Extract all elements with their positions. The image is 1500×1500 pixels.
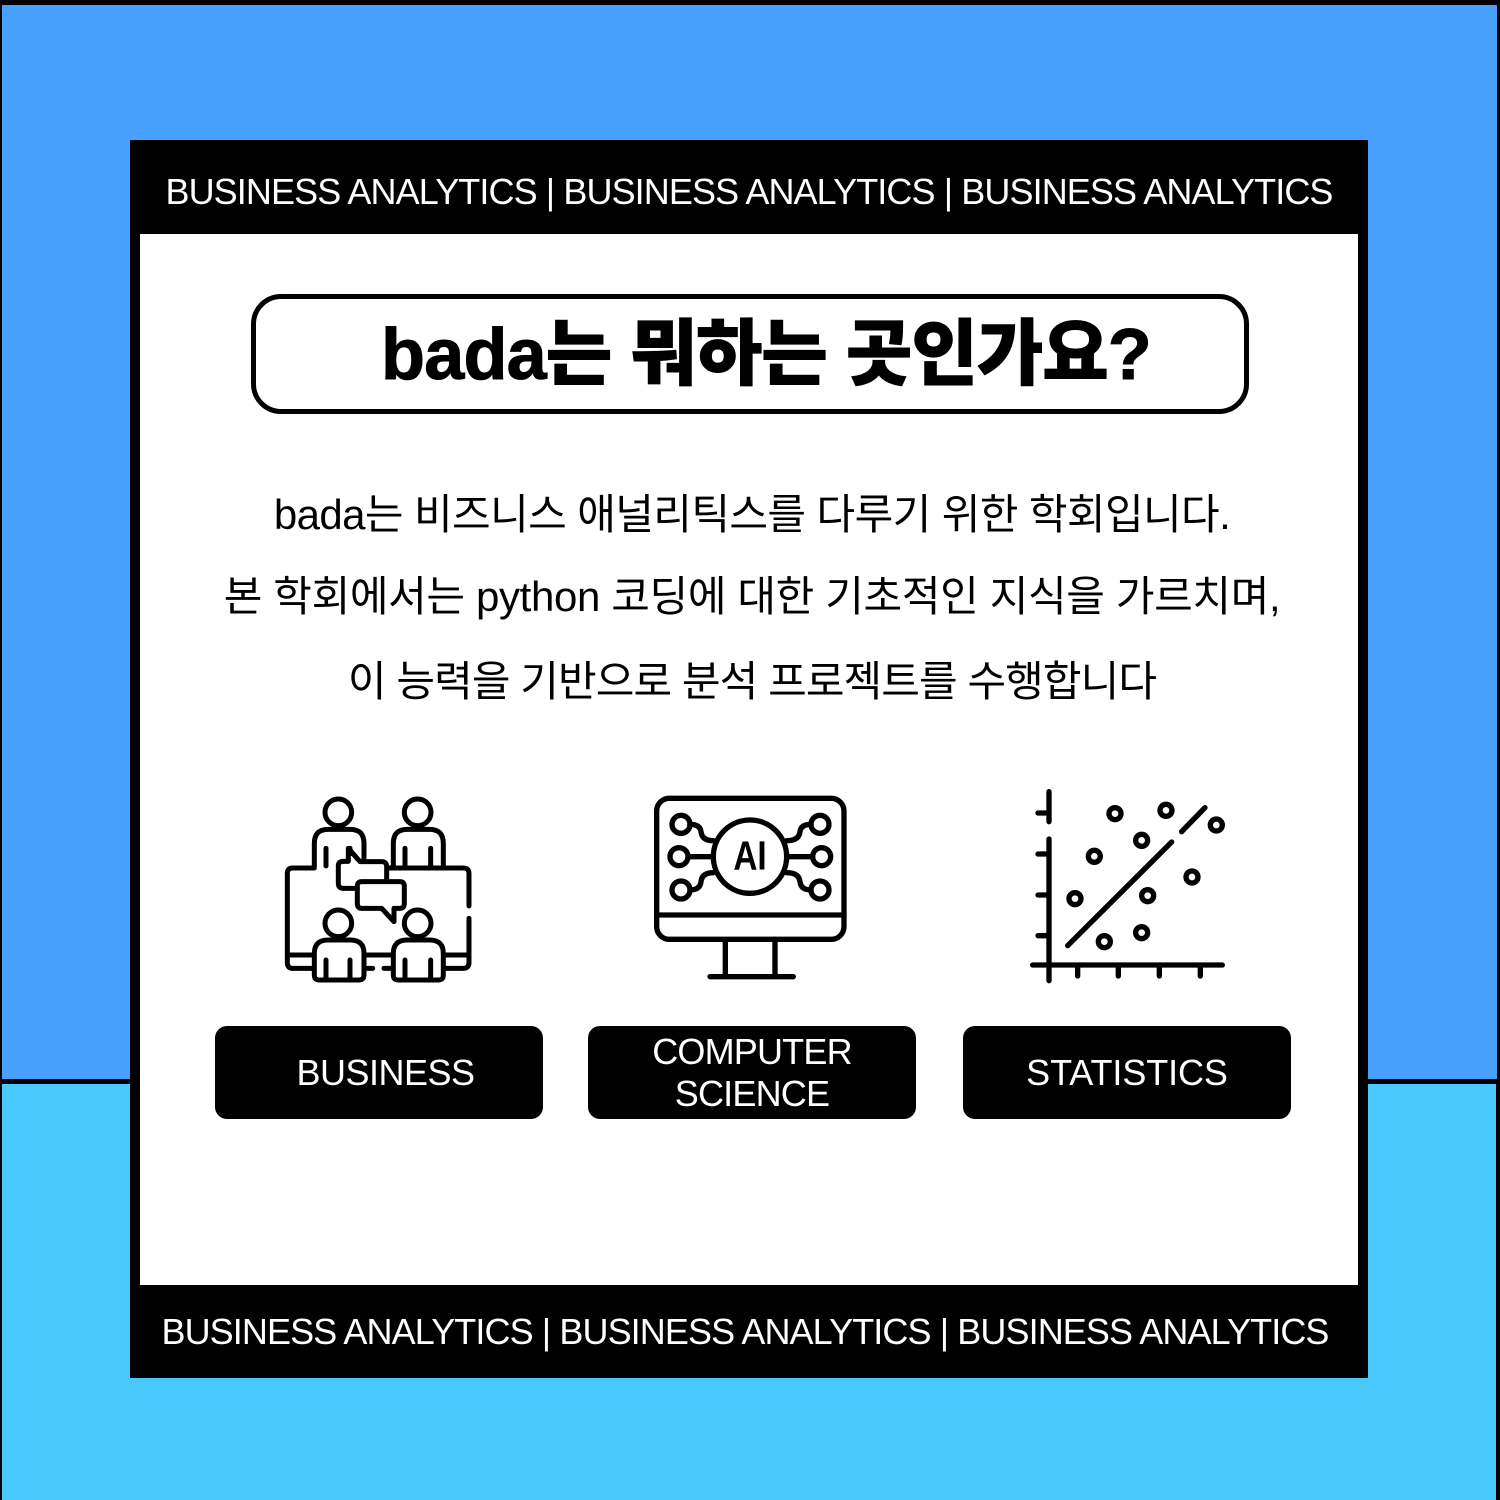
button: computer science: [588, 1026, 916, 1119]
button: business: BUSINESS: [296, 1052, 475, 1092]
title box: [251, 294, 1249, 414]
description line 1: bada는 비즈니스 애널리틱스를 다루기 위한 학회입니다.: [274, 491, 1230, 538]
button: statistics: STATISTICS: [1026, 1052, 1228, 1092]
background: lower sky blue: [2, 1084, 1496, 1500]
top ticker text: BUSINESS ANALYTICS | BUSINESS ANALYTICS | BUSINESS ANALYTICS: [165, 171, 1333, 212]
button: business: [215, 1026, 543, 1119]
button: computer science: SCIENCE: [675, 1072, 829, 1114]
button: computer science: COMPUTER: [652, 1030, 852, 1072]
button: statistics: [963, 1026, 1291, 1119]
main card: [130, 140, 1368, 1378]
description line 2: 본 학회에서는 python 코딩에 대한 기초적인 지식을 가르치며,: [224, 573, 1280, 620]
icon: AI computer monitor: AI: [733, 832, 767, 878]
bottom ticker text: BUSINESS ANALYTICS | BUSINESS ANALYTICS | BUSINESS ANALYTICS: [161, 1311, 1329, 1352]
title text: bada는 뭐하는 곳인가요?: [381, 315, 1151, 395]
white content panel: [140, 234, 1358, 1285]
background: upper blue: [2, 5, 1497, 1079]
description line 3: 이 능력을 기반으로 분석 프로젝트를 수행합니다: [348, 658, 1156, 705]
